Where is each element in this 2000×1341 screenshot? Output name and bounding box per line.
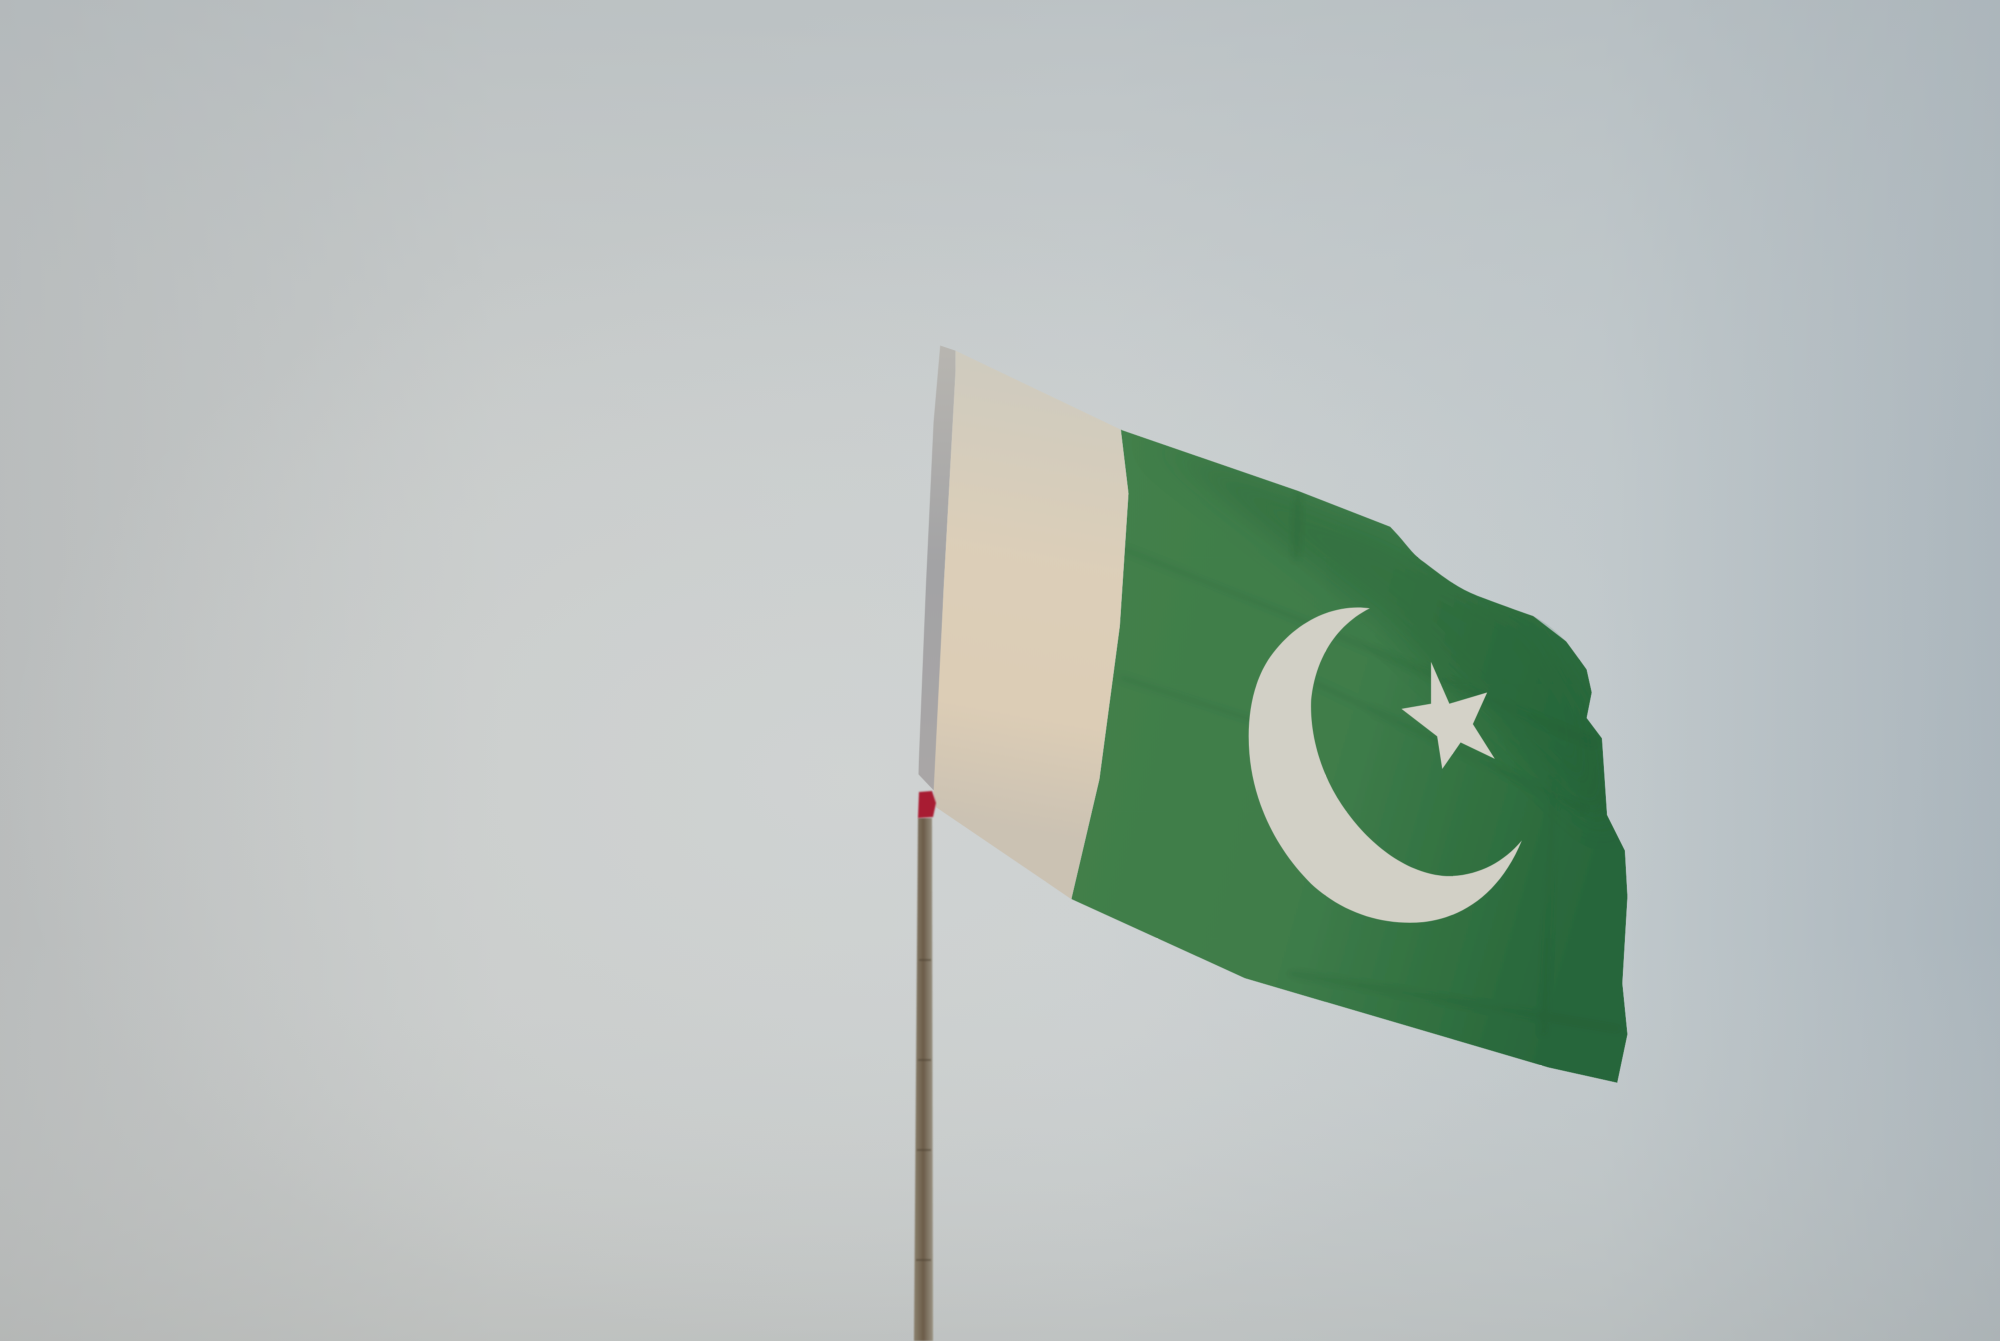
crescent: [1249, 607, 1522, 923]
white hoist band: [934, 351, 1128, 899]
star: [1401, 662, 1495, 769]
red tie on pole: [918, 791, 936, 818]
green field: [1071, 430, 1627, 1083]
flagpole: [914, 818, 933, 1341]
flag sleeve: [918, 346, 956, 792]
flag: [918, 346, 1627, 1083]
